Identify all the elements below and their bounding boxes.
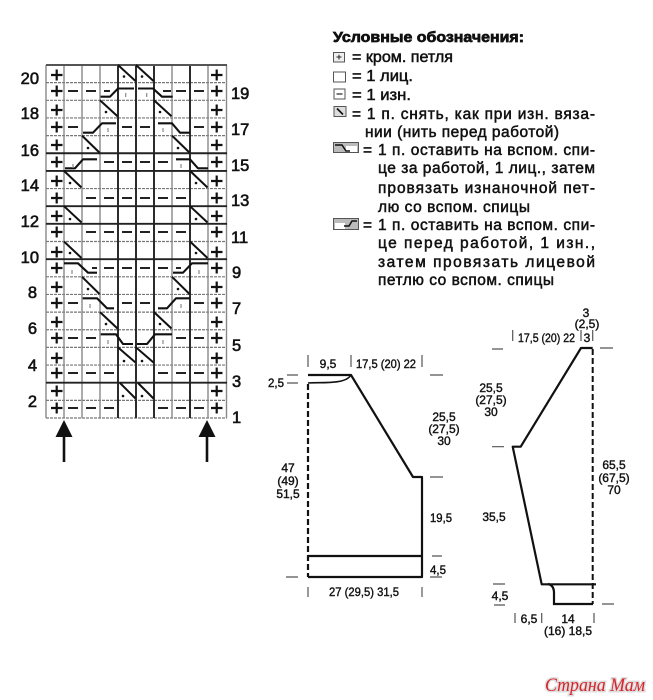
dimension labels: 51,5 (276, 487, 300, 501)
dimension labels: 30 (437, 434, 451, 448)
watermark: Страна Мам (545, 675, 645, 696)
panel: legend (334, 49, 595, 289)
dimension labels: (2,5) (575, 317, 599, 331)
outline: sleeve (513, 348, 596, 604)
left row numbers: 6 (28, 320, 37, 338)
right row numbers (231, 85, 249, 427)
dimension labels: 9,5 (320, 357, 337, 371)
dimension labels (475, 306, 630, 638)
icon: purl stitch (334, 89, 345, 99)
left row numbers: 12 (21, 213, 39, 231)
panel: front and back schematic (268, 355, 460, 599)
outline: garment (308, 375, 422, 577)
dimension labels: 70 (607, 483, 621, 497)
left row numbers: 14 (21, 177, 39, 195)
right row numbers: 5 (232, 337, 241, 355)
right row numbers: 3 (232, 373, 241, 391)
dimension labels: (67,5) (598, 471, 630, 485)
legend text: cable behind: провязать изнаночной пет- (378, 180, 595, 197)
dimension labels: 30 (484, 405, 498, 419)
legend text: edge stitch: = кром. петля (352, 49, 453, 66)
legend text: purl stitch: = 1 изн. (352, 87, 411, 104)
dimension labels: 3 (584, 331, 591, 345)
arrow: right marker (198, 420, 216, 462)
legend text: slip stitch continued: нии (нить перед работой) (365, 124, 559, 141)
left row numbers: 16 (21, 142, 39, 160)
dimension ticks (286, 355, 443, 597)
legend text: cable front: 1 п. оставить на вспом. спи- (378, 217, 595, 234)
legend text: cable front: це перед работой, 1 изн., (378, 235, 595, 252)
right row numbers: 13 (231, 192, 249, 210)
icon: knit stitch (334, 72, 346, 82)
right row numbers: 9 (232, 264, 241, 282)
icon: edge stitch (334, 52, 344, 62)
purl dashes (68, 91, 204, 408)
dimension labels: 19,5 (430, 511, 452, 525)
dimension labels: 35,5 (482, 510, 506, 524)
legend text: cable front: = (363, 217, 372, 234)
slip stitch diagonals (64, 65, 208, 398)
dimension labels: 17,5 (20) 22 (356, 357, 416, 371)
left row numbers (21, 70, 39, 411)
right row numbers: 15 (231, 157, 249, 175)
legend text: cable behind: це за работой, 1 лиц., затем (378, 160, 595, 177)
dimension labels: 17,5 (20) 22 (518, 331, 575, 345)
dimension labels: 65,5 (602, 458, 626, 472)
legend text: cable behind: = (363, 142, 372, 159)
dimension labels: 6,5 (521, 612, 538, 626)
dimension labels: 27 (29,5) 31,5 (329, 585, 399, 599)
dimension labels (268, 357, 460, 599)
left row numbers: 10 (21, 249, 39, 267)
icon: slip stitch (334, 106, 346, 116)
dimension labels: (16) 18,5 (544, 624, 592, 638)
legend text: cable front: петлю со вспом. спицы (378, 272, 554, 289)
legend text: cable front: затем провязать лицевой (378, 254, 595, 271)
right row numbers: 17 (231, 121, 249, 139)
left row numbers: 4 (28, 357, 37, 375)
dimension labels: (27,5) (475, 393, 507, 407)
cable knit ticks (72, 93, 199, 344)
arrow: left marker (56, 420, 72, 462)
dimension labels: 2,5 (268, 376, 284, 390)
chart: knitting pattern grid (46, 65, 227, 418)
dimension labels: 25,5 (432, 410, 456, 424)
legend text: cable behind: 1 п. оставить на вспом. спи- (378, 142, 595, 159)
right row numbers: 7 (232, 300, 241, 318)
right row numbers: 19 (231, 85, 249, 103)
legend text: cable behind (363, 142, 595, 216)
dimension labels: 25,5 (479, 381, 503, 395)
left row numbers: 18 (21, 105, 39, 123)
dimension labels: (49) (277, 474, 299, 488)
icon: cable front (334, 218, 358, 230)
legend text: cable front (363, 217, 595, 289)
legend text: cable behind: лю со вспом. спицы (378, 199, 530, 216)
left row numbers: 20 (21, 70, 39, 88)
legend heading: Условные обозначения: (333, 29, 524, 46)
edge stitch plus signs (51, 70, 222, 414)
panel: sleeve schematic (475, 306, 630, 638)
dimension labels: (27,5) (428, 422, 460, 436)
right row numbers: 1 (232, 409, 241, 427)
left row numbers: 2 (28, 393, 37, 411)
icon: cable behind (334, 142, 358, 152)
legend text: knit stitch: = 1 лиц. (352, 68, 413, 85)
dimension labels: 14 (561, 612, 575, 626)
legend text: slip stitch: = 1 п. снять, как при изн. вяза- (352, 106, 595, 123)
cable crossings (64, 88, 208, 344)
slip stitch dots (70, 76, 196, 396)
dimension labels: 4,5 (492, 589, 509, 603)
dimension ticks (492, 330, 614, 623)
dimension labels: 3 (583, 306, 590, 320)
right row numbers: 11 (231, 229, 248, 247)
dimension labels: 47 (281, 461, 295, 475)
left row numbers: 8 (28, 284, 37, 302)
dimension labels: 4,5 (430, 563, 446, 577)
